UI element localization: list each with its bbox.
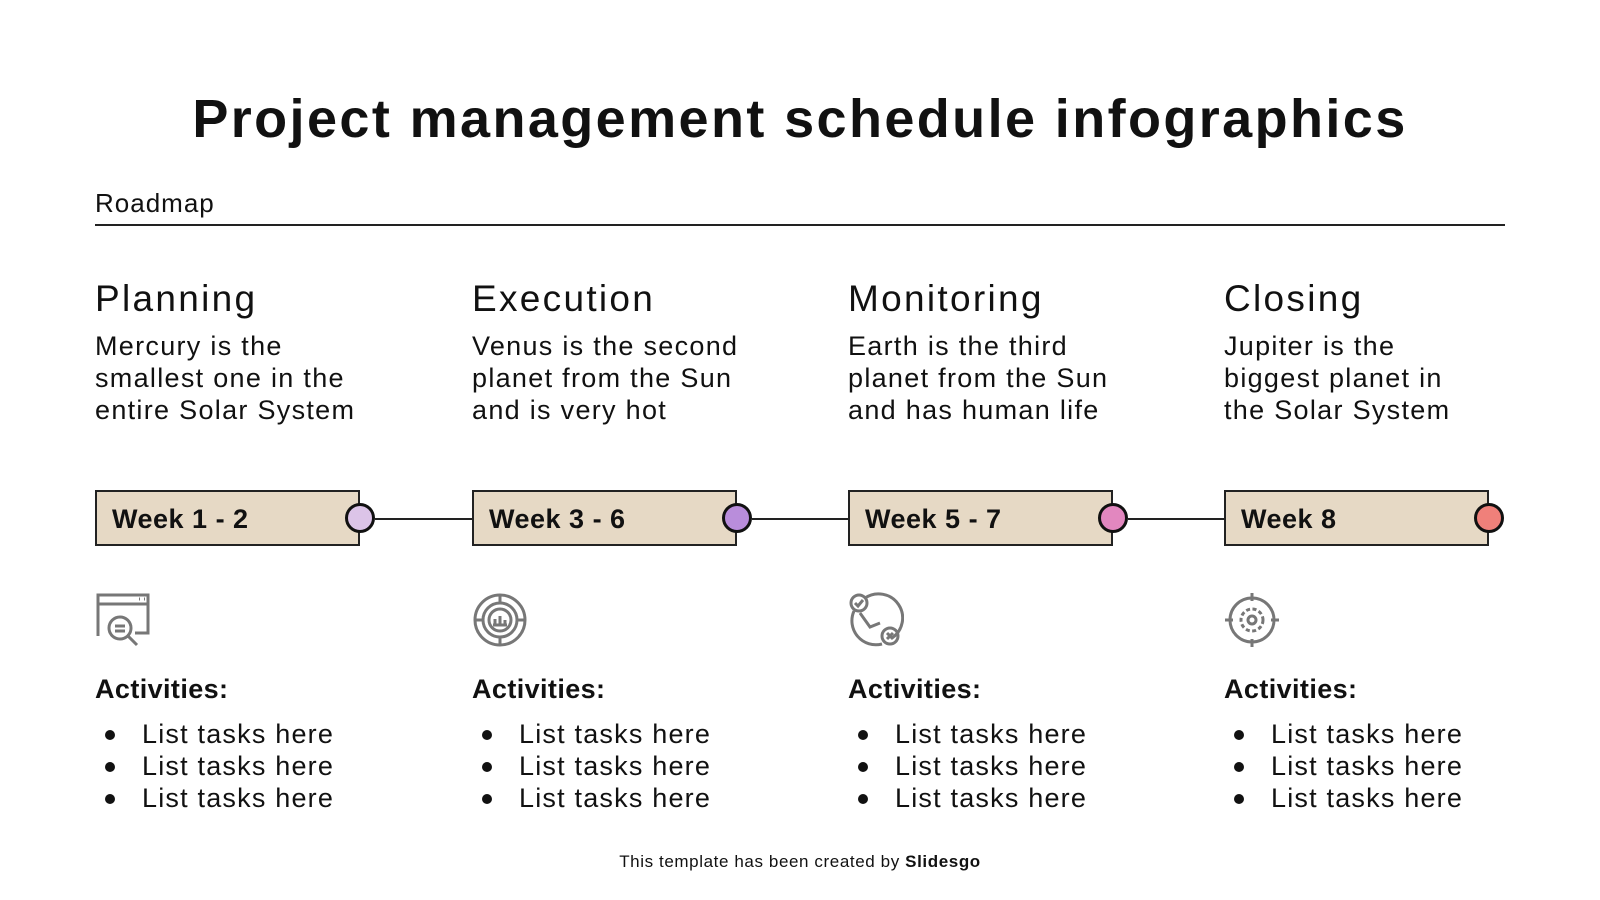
task list: List tasks here bbox=[142, 719, 334, 749]
task list bbox=[1234, 719, 1463, 813]
task list: List tasks here bbox=[1271, 719, 1463, 749]
timeline dot bbox=[345, 503, 375, 533]
timeline dot bbox=[722, 503, 752, 533]
icon: chart circle bbox=[474, 594, 526, 646]
description: and has human life bbox=[848, 395, 1100, 425]
task list: List tasks here bbox=[142, 783, 334, 813]
task list bbox=[482, 719, 711, 813]
task list: List tasks here bbox=[895, 751, 1087, 781]
description bbox=[848, 331, 1108, 425]
icon: clock check bbox=[850, 592, 904, 646]
task list bbox=[105, 719, 334, 813]
week box: Week 3 - 6 bbox=[489, 504, 626, 534]
task list: List tasks here bbox=[519, 719, 711, 749]
description bbox=[1224, 331, 1450, 425]
heading: Planning bbox=[95, 278, 257, 319]
task list: List tasks here bbox=[895, 783, 1087, 813]
task list: List tasks here bbox=[895, 719, 1087, 749]
description: planet from the Sun bbox=[848, 363, 1108, 393]
panel: monitoring bbox=[848, 278, 1224, 813]
task list: List tasks here bbox=[1271, 751, 1463, 781]
panel: closing bbox=[1224, 278, 1504, 813]
week box bbox=[848, 490, 1113, 546]
timeline dot bbox=[1474, 503, 1504, 533]
description: entire Solar System bbox=[95, 395, 355, 425]
task list: List tasks here bbox=[142, 751, 334, 781]
activities heading: Activities: bbox=[1224, 674, 1357, 704]
description: planet from the Sun bbox=[472, 363, 732, 393]
heading: Execution bbox=[472, 278, 655, 319]
activities heading: Activities: bbox=[472, 674, 605, 704]
subtitle: Roadmap: Roadmap bbox=[95, 188, 215, 218]
heading: Closing bbox=[1224, 278, 1364, 319]
description: the Solar System bbox=[1224, 395, 1450, 425]
footer credit: This template has been created by Slidesgo bbox=[619, 852, 981, 871]
description bbox=[472, 331, 738, 425]
activities heading: Activities: bbox=[95, 674, 228, 704]
icon: gear target bbox=[1225, 593, 1279, 647]
week box: Week 8 bbox=[1241, 504, 1337, 534]
week box bbox=[472, 490, 737, 546]
description: biggest planet in bbox=[1224, 363, 1443, 393]
title: Project management schedule infographics bbox=[192, 89, 1408, 149]
description: and is very hot bbox=[472, 395, 667, 425]
panel: execution bbox=[472, 278, 848, 813]
description: Mercury is the bbox=[95, 331, 283, 361]
task list bbox=[858, 719, 1087, 813]
description: Jupiter is the bbox=[1224, 331, 1395, 361]
week box bbox=[1224, 490, 1489, 546]
description: smallest one in the bbox=[95, 363, 345, 393]
week box: Week 1 - 2 bbox=[112, 504, 249, 534]
description bbox=[95, 331, 355, 425]
timeline dot bbox=[1098, 503, 1128, 533]
task list: List tasks here bbox=[519, 751, 711, 781]
task list: List tasks here bbox=[1271, 783, 1463, 813]
activities heading: Activities: bbox=[848, 674, 981, 704]
description: Venus is the second bbox=[472, 331, 738, 361]
description: Earth is the third bbox=[848, 331, 1068, 361]
panel: planning bbox=[95, 278, 472, 813]
task list: List tasks here bbox=[519, 783, 711, 813]
week box: Week 5 - 7 bbox=[865, 504, 1002, 534]
icon: search window bbox=[96, 594, 150, 646]
week box bbox=[95, 490, 360, 546]
heading: Monitoring bbox=[848, 278, 1044, 319]
